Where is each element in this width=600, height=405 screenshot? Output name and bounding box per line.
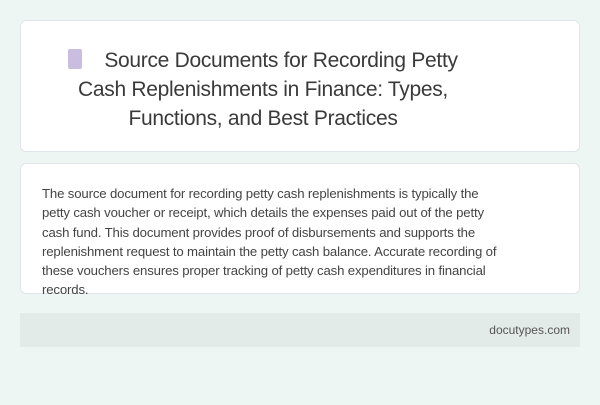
description text — [42, 186, 497, 297]
title: Cash Replenishments in Finance: Types, — [78, 78, 448, 101]
footer: docutypes.com — [489, 323, 570, 337]
title card — [20, 20, 580, 152]
description card — [20, 163, 580, 294]
description text: these vouchers ensures proper tracking of petty cash expenditures in financial — [42, 263, 486, 278]
description text: replenishment request to maintain the petty cash balance. Accurate recording of — [42, 244, 496, 259]
description text: petty cash voucher or receipt, which details the expenses paid out of the petty — [42, 205, 484, 220]
title: Source Documents for Recording Petty — [104, 49, 458, 72]
title: Functions, and Best Practices — [128, 107, 398, 130]
footer — [20, 313, 580, 347]
description text: records. — [42, 282, 88, 297]
description text: cash fund. This document provides proof of disbursements and supports the — [42, 225, 475, 240]
description text: The source document for recording petty cash replenishments is typically the — [42, 186, 478, 201]
icon: document — [68, 49, 82, 69]
title — [68, 49, 458, 130]
